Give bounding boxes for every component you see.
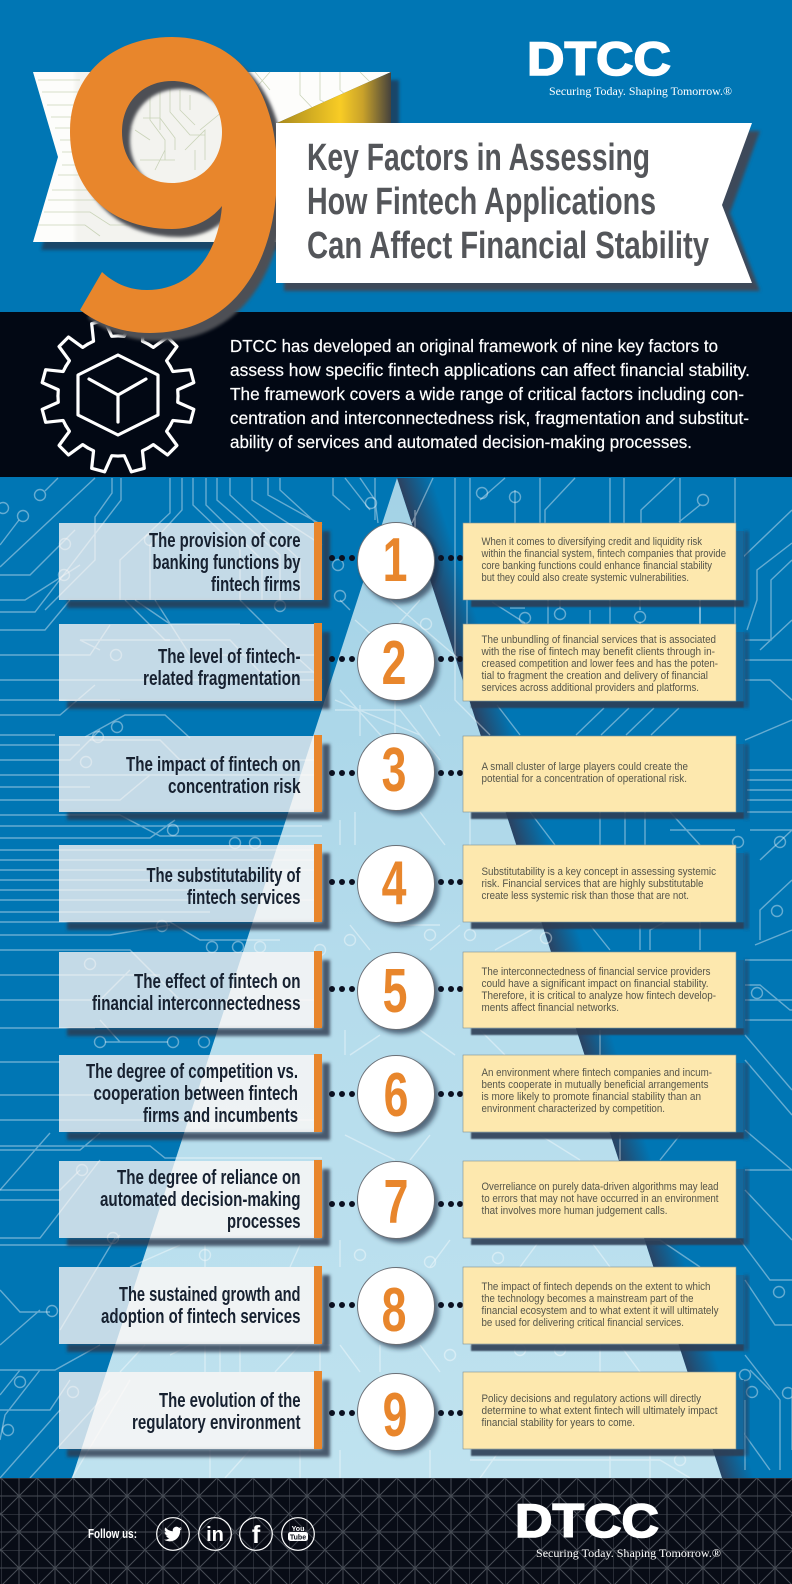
factor 8 connector dots — [329, 1302, 463, 1308]
icon: facebook — [240, 1518, 272, 1550]
factor 5 title box: The effect of fintech on — [134, 971, 300, 993]
factor 7 connector dots — [329, 1201, 463, 1207]
factor 6 description box — [463, 1055, 749, 1139]
back ribbon — [33, 72, 391, 242]
factor 2 description box: creased competition and lower fees and has the poten- — [482, 658, 718, 670]
factor 9 description box: determine to what extent fintech will ultimately impact — [482, 1405, 718, 1417]
factor 7 description box: to errors that may not have occurred in an environment — [482, 1193, 718, 1205]
title: How Fintech Applications — [307, 181, 656, 223]
ribbon circuit pattern — [38, 72, 370, 236]
title: Key Factors in Assessing — [307, 137, 650, 179]
factor 4 title box — [59, 844, 322, 922]
factor 5 description box: ments affect financial networks. — [482, 1002, 619, 1014]
intro text: assess how specific fintech applications can affect financial stability. — [230, 360, 750, 380]
icon: youtube: Tube — [290, 1534, 306, 1542]
title — [307, 137, 709, 267]
factor 7 — [59, 1160, 749, 1246]
factor 5 number circle — [358, 952, 439, 1034]
follow us label: Follow us: — [88, 1526, 137, 1541]
factor 2 description box: with the rise of fintech may benefit clients through in- — [481, 646, 715, 658]
icon: youtube — [282, 1518, 314, 1550]
factor 2 description box: tial to fragment the creation and delivery of financial — [482, 670, 708, 682]
dark intro band — [0, 312, 792, 477]
factor 5 title box: financial interconnectedness — [92, 993, 300, 1015]
factor 3 number circle: 3 — [382, 736, 406, 805]
factor 8 number circle: 8 — [382, 1276, 406, 1345]
logo: DTCC header: DTCC — [527, 32, 671, 85]
factor 5 connector dots — [329, 986, 463, 992]
factor 1 description box: core banking functions could enhance financial stability — [482, 560, 713, 572]
factor 4 description box — [463, 845, 749, 929]
factor 6 title box: The degree of competition vs. — [86, 1061, 298, 1083]
logo: DTCC footer — [515, 1494, 721, 1560]
factor 1 description box — [463, 523, 749, 607]
factor 7 title box — [59, 1160, 322, 1238]
factor 8 — [59, 1266, 749, 1352]
factor 3 title box: concentration risk — [168, 776, 301, 798]
factor 1 title box: banking functions by — [152, 552, 301, 574]
intro text: centration and interconnectedness risk, fragmentation and substitut- — [230, 408, 749, 428]
factor 7 description box: Overreliance on purely data-driven algorithms may lead — [482, 1181, 718, 1193]
factor 3 — [59, 734, 749, 820]
factor 8 description box: The impact of fintech depends on the extent to which — [482, 1281, 710, 1293]
factor 9 title box — [59, 1371, 322, 1449]
big number 9 — [70, 37, 277, 333]
factor 2 number circle — [358, 624, 439, 705]
icon: twitter — [157, 1518, 189, 1550]
factor 7 title box: automated decision-making — [100, 1189, 300, 1211]
factor 1 number circle: 1 — [383, 526, 407, 595]
factor 4 — [59, 844, 749, 930]
factor 8 title box — [59, 1266, 322, 1344]
logo: DTCC header — [527, 32, 732, 98]
factor 4 title box: fintech services — [187, 887, 300, 909]
factor 8 description box: be used for delivering critical financial services. — [482, 1317, 684, 1329]
big number 9 shadow — [78, 45, 285, 341]
factor 9 description box — [463, 1372, 749, 1456]
factor 1 title box — [59, 522, 322, 600]
factor 6 title box: firms and incumbents — [143, 1105, 298, 1127]
factor 6 description box: environment characterized by competition. — [482, 1103, 665, 1115]
factor 1 title box: The provision of core — [149, 530, 300, 552]
factor 6 title box — [59, 1054, 322, 1132]
intro text: ability of services and automated decision-making processes. — [230, 432, 692, 452]
factor 3 number circle — [358, 734, 439, 815]
gold fold — [277, 72, 391, 123]
factor 2 title box: related fragmentation — [143, 668, 300, 690]
factor 3 title box — [59, 735, 322, 812]
factor 8 number circle — [358, 1268, 439, 1349]
factor 1 description box: but they could also create systemic vulnerabilities. — [482, 572, 689, 584]
factor 6 — [59, 1054, 749, 1140]
factor 1 description box: When it comes to diversifying credit and liquidity risk — [482, 536, 703, 548]
pyramid shadow — [397, 478, 790, 1478]
factor 7 title box: processes — [227, 1211, 300, 1233]
factor 3 description box — [463, 736, 749, 819]
factor 3 connector dots — [329, 770, 463, 776]
factor 9 connector dots — [329, 1410, 463, 1416]
factor 7 description box: that involves more human judgement calls. — [482, 1205, 668, 1217]
factor 4 title box: The substitutability of — [146, 865, 301, 887]
factor 8 description box — [463, 1267, 749, 1351]
intro text: DTCC has developed an original framework of nine key factors to — [230, 336, 718, 356]
factor 5 description box: could have a significant impact on financial stability. — [482, 978, 708, 990]
factor 4 number circle — [358, 846, 439, 927]
factor 7 description box — [463, 1161, 749, 1245]
factor 6 number circle — [358, 1056, 439, 1137]
factor 2 description box — [463, 624, 749, 708]
factor 7 number circle — [358, 1162, 439, 1243]
factor 2 title box — [59, 623, 322, 701]
factor 7 title box: The degree of reliance on — [117, 1167, 300, 1189]
factor 2 description box: The unbundling of financial services that is associated — [482, 634, 716, 646]
logo: DTCC header: Securing Today. Shaping Tomorrow.® — [549, 86, 732, 98]
front ribbon shadow — [284, 131, 760, 291]
factor 9 number circle: 9 — [383, 1381, 407, 1450]
factor 8 description box: financial ecosystem and to what extent it will ultimately — [482, 1305, 719, 1317]
logo: DTCC footer: DTCC — [515, 1494, 659, 1547]
factor 1 title box: fintech firms — [211, 574, 300, 596]
factor 3 description box: potential for a concentration of operational risk. — [482, 773, 687, 785]
factor 1 number circle — [358, 522, 439, 604]
factor 7 number circle: 7 — [384, 1168, 408, 1237]
front ribbon — [276, 123, 752, 283]
factor 1 description box: within the financial system, fintech companies that provide — [481, 548, 726, 560]
factor 3 description box: A small cluster of large players could create the — [482, 761, 688, 773]
factor 6 connector dots — [329, 1091, 463, 1097]
factor 6 description box: An environment where fintech companies and incum- — [482, 1067, 712, 1079]
intro text: The framework covers a wide range of critical factors including con- — [230, 384, 744, 404]
icon: facebook: f — [252, 1521, 261, 1549]
icon: youtube: You — [292, 1526, 304, 1533]
factor 5 description box: Therefore, it is critical to analyze how fintech develop- — [482, 990, 716, 1002]
back ribbon shadow — [41, 80, 399, 250]
factor 5 description box: The interconnectedness of financial service providers — [482, 966, 711, 978]
factor 5 description box — [463, 952, 749, 1035]
factor 2 — [59, 623, 749, 709]
factor 1 — [59, 522, 749, 608]
footer — [0, 1478, 792, 1584]
factor 9 description box: financial stability for years to come. — [482, 1417, 635, 1429]
factor 2 number circle: 2 — [382, 629, 406, 698]
icon: linkedin — [199, 1518, 231, 1550]
factor 9 title box: The evolution of the — [159, 1390, 300, 1412]
factor 2 connector dots — [329, 656, 463, 662]
factor 4 description box: risk. Financial services that are highly substitutable — [482, 878, 704, 890]
factor 4 description box: create less systemic risk than those that are not. — [482, 890, 689, 902]
factor 9 number circle — [358, 1374, 439, 1455]
factor 2 title box: The level of fintech- — [158, 646, 300, 668]
factor 8 description box: the technology becomes a mainstream part of the — [482, 1293, 694, 1305]
factor 6 title box: cooperation between fintech — [94, 1083, 298, 1105]
factor 8 title box: The sustained growth and — [119, 1284, 300, 1306]
logo: DTCC footer: Securing Today. Shaping Tomorrow.® — [536, 1548, 721, 1560]
factor 5 — [59, 951, 749, 1036]
factor 8 title box: adoption of fintech services — [101, 1306, 300, 1328]
factor 5 title box — [59, 951, 322, 1028]
factor 2 description box: services across additional providers and platforms. — [482, 682, 699, 694]
factor 3 title box: The impact of fintech on — [126, 754, 300, 776]
icon: gear with cube — [40, 318, 196, 474]
pyramid — [72, 478, 722, 1478]
factor 6 description box: bents cooperate in mutually beneficial arrangements — [482, 1079, 709, 1091]
factor 9 — [59, 1371, 749, 1457]
factor 5 number circle: 5 — [383, 957, 407, 1026]
factor 1 connector dots — [329, 555, 463, 561]
intro text — [230, 336, 750, 452]
factor 9 description box: Policy decisions and regulatory actions will directly — [482, 1393, 702, 1405]
factor 4 description box: Substitutability is a key concept in assessing systemic — [482, 866, 717, 878]
factor 6 number circle: 6 — [384, 1061, 408, 1130]
factor 4 connector dots — [329, 879, 463, 885]
factor 6 description box: is more likely to promote financial stability than an — [482, 1091, 701, 1103]
circuit board pattern — [0, 478, 792, 1478]
factor 4 number circle: 4 — [382, 849, 406, 918]
factor 9 title box: regulatory environment — [132, 1412, 301, 1434]
icon: linkedin: in — [206, 1524, 224, 1546]
